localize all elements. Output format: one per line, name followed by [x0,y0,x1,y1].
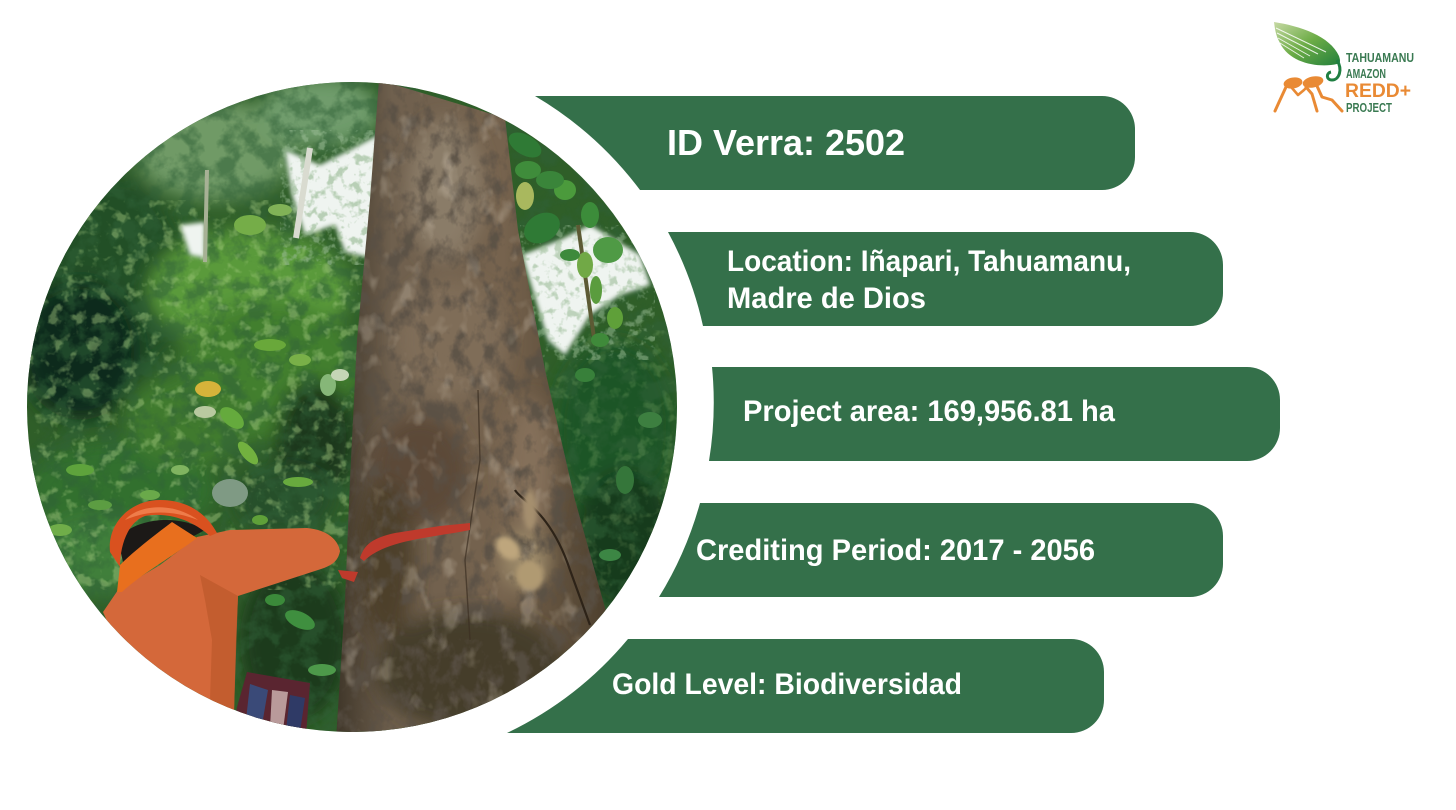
pill: gold level: Gold Level: Biodiversidad [612,668,962,701]
logo: Tahuamanu Amazon REDD+ Project [1274,22,1414,115]
worker [103,500,340,712]
foliage texture [20,75,690,740]
logo wordmark: REDD+ [1345,81,1411,102]
tree trunk [336,80,616,740]
pill: gold level [507,639,1104,733]
photo: worker marking a large tree in the forest [20,75,690,740]
leaves [48,127,662,676]
logo leaf [1274,22,1340,80]
hard hat [110,500,217,567]
pill: ID Verra [535,96,1135,190]
hair and shadow under helmet [121,520,204,562]
paint can [236,672,310,729]
sky patches [180,135,650,355]
logo wordmark [1345,51,1414,115]
red paint mark [338,523,470,582]
pill: location: Madre de Dios [727,282,926,315]
pill: ID Verra: ID Verra: 2502 [667,122,905,163]
neck scarf [117,522,197,592]
pill: crediting period: Crediting Period: 2017 - 2056 [696,534,1095,567]
pill: project area: Project area: 169,956.81 ha [743,395,1115,428]
logo wordmark: TAHUAMANU [1346,51,1414,65]
background tree trunks [205,148,595,345]
forest masses [20,77,675,720]
pill: location [668,232,1223,326]
pill: crediting period [659,503,1223,597]
logo ant [1275,74,1342,111]
pill: location: Location: Iñapari, Tahuamanu, [727,245,1131,278]
logo wordmark: AMAZON [1346,67,1386,81]
leaf speckle over sky [280,130,380,265]
pill: project area [709,367,1280,461]
logo wordmark: PROJECT [1346,101,1392,115]
